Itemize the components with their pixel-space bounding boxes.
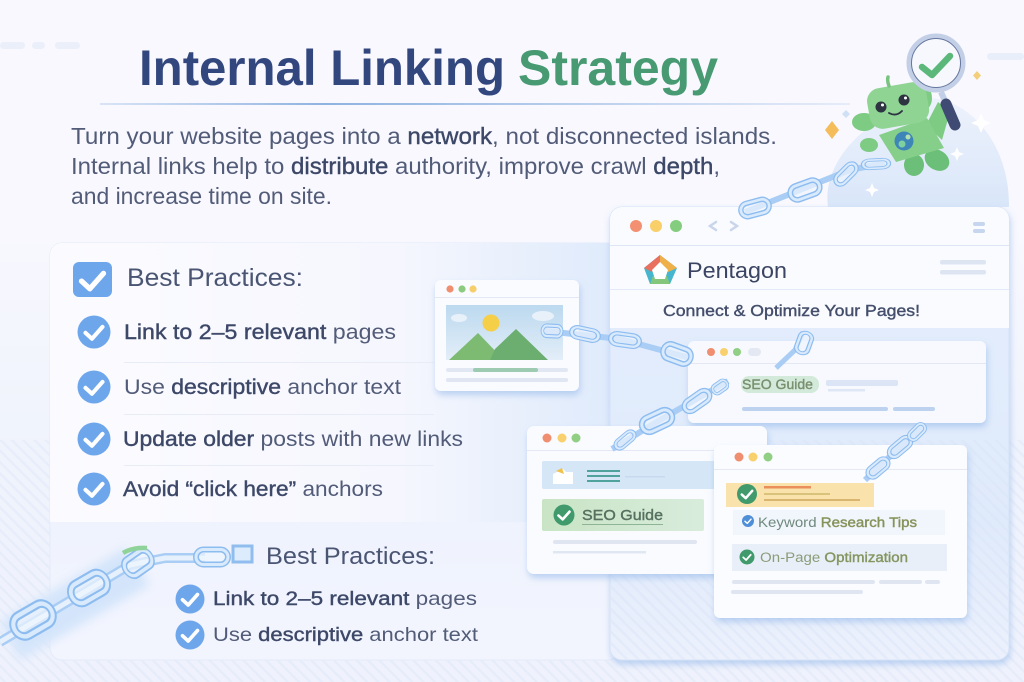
panel: best practices <box>50 243 620 660</box>
title <box>139 40 718 96</box>
checkbox icon <box>73 262 112 297</box>
icon: magnifying glass <box>909 36 963 125</box>
card: SEO guide page <box>527 426 767 574</box>
title: Internal Linking <box>139 40 505 96</box>
card: SEO guide tab <box>688 341 986 423</box>
chain: image card to main window <box>542 325 693 366</box>
intro paragraph: Turn your website pages into a network, not disconnected islands. <box>71 123 777 149</box>
panel heading: Best Practices: <box>127 264 303 292</box>
on-page row: On-Page Optimization <box>760 550 908 565</box>
card: image page <box>435 280 579 391</box>
keyword row <box>733 510 945 535</box>
practice list: Use descriptive anchor text <box>124 376 401 399</box>
robot arms <box>852 86 950 152</box>
robot head <box>865 80 931 131</box>
title: Strategy <box>518 40 718 96</box>
brand name: Pentagon <box>687 258 787 283</box>
practice list <box>78 316 463 506</box>
chain: robot to main window <box>739 159 889 218</box>
robot mascot <box>852 77 953 176</box>
chain: bottom left <box>0 546 252 660</box>
robot body <box>879 118 944 162</box>
intro paragraph <box>71 123 777 209</box>
practice list: Avoid “click here” anchors <box>123 478 383 501</box>
robot backdrop blob <box>827 98 1009 207</box>
card: keyword page <box>714 445 967 618</box>
title underline <box>100 103 850 105</box>
chain: SEO tab top <box>776 331 813 368</box>
page label: SEO Guide <box>582 507 663 524</box>
chain: keyword card <box>865 422 927 480</box>
panel: main browser window <box>610 207 1009 660</box>
lower practice list <box>176 584 479 650</box>
highlighted row <box>726 483 874 507</box>
image thumbnail <box>446 305 563 360</box>
intro paragraph: Internal links help to distribute authority, improve crawl depth, <box>71 153 720 179</box>
window tagline: Connect & Optimize Your Pages! <box>663 303 920 320</box>
icon: pentagon logo <box>644 255 677 284</box>
lower practice list: Link to 2–5 relevant pages <box>213 588 477 610</box>
window controls <box>630 220 985 233</box>
on-page row <box>732 544 947 571</box>
menu icon <box>940 260 986 274</box>
lower practices heading: Best Practices: <box>266 543 435 570</box>
tab label: SEO Guide <box>742 377 813 392</box>
robot legs <box>904 145 953 176</box>
keyword row: Keyword Research Tips <box>758 515 917 530</box>
sparkles <box>825 71 991 197</box>
lower practice list: Use descriptive anchor text <box>213 624 479 646</box>
intro paragraph: and increase time on site. <box>71 183 332 209</box>
chain: main window to SEO guide page <box>612 379 729 451</box>
practice list: Link to 2–5 relevant pages <box>124 321 396 344</box>
practice list: Update older posts with new links <box>123 428 463 451</box>
